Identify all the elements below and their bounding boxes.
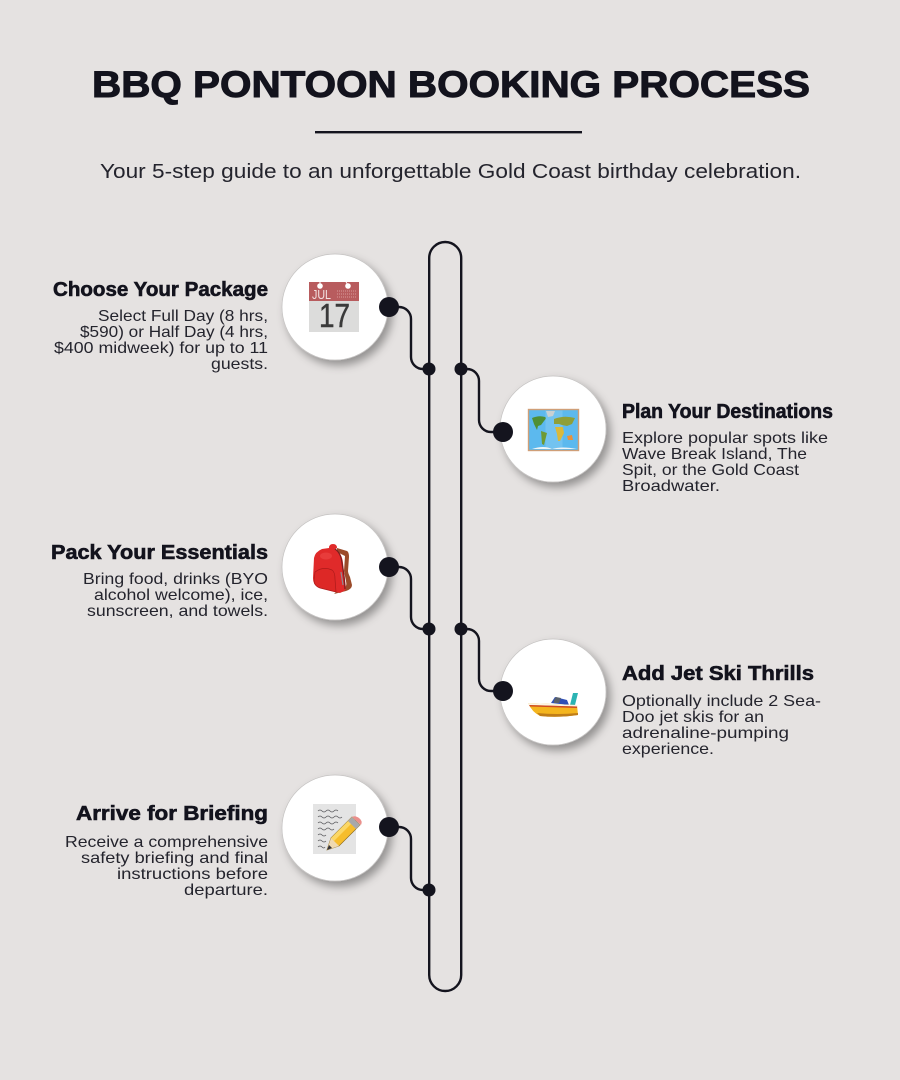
step 1 icon disc: calendar: JUL	[312, 288, 331, 302]
step 1 icon disc: calendar	[282, 254, 388, 360]
timeline track	[429, 242, 461, 991]
step 3 text: alcohol welcome), ice,	[94, 587, 268, 604]
step 5 text: instructions before	[117, 866, 268, 883]
step 4 text: Optionally include 2 Sea-	[622, 693, 821, 710]
step 3: pack your essentials	[51, 514, 436, 636]
step 4: add jet ski thrills	[454, 622, 821, 758]
step 3 text: Bring food, drinks (BYO	[83, 571, 268, 588]
step 5 text	[65, 803, 268, 899]
step 2 text: Explore popular spots like	[622, 430, 828, 447]
step 2 connector	[454, 362, 513, 442]
step 2 text: Spit, or the Gold Coast	[622, 462, 800, 479]
step 5 text: Arrive for Briefing	[76, 803, 268, 825]
step 3 connector	[379, 557, 436, 636]
subtitle: Your 5-step guide to an unforgettable Gold Coast birthday celebration.	[100, 161, 801, 183]
step 5 connector	[379, 817, 436, 896]
step 4 text: adrenaline-pumping	[622, 725, 789, 742]
step 1 text	[53, 279, 268, 373]
step 4 connector	[454, 622, 513, 701]
step 2: plan your destinations	[454, 362, 833, 495]
step 3 icon disc: backpack	[282, 514, 388, 620]
step 1 text: guests.	[211, 356, 268, 373]
step 1 text: Select Full Day (8 hrs,	[98, 308, 268, 325]
step 5 text: safety briefing and final	[81, 850, 268, 867]
step 4 text	[622, 663, 821, 758]
step 3 text: Pack Your Essentials	[51, 542, 268, 564]
step 3 text: sunscreen, and towels.	[87, 603, 268, 620]
step 5 text: Receive a comprehensive	[65, 834, 268, 851]
step 4 text: Doo jet skis for an	[622, 709, 764, 726]
step 5 text: departure.	[184, 882, 268, 899]
step 2 text: Plan Your Destinations	[622, 401, 833, 423]
step 4 text: experience.	[622, 741, 714, 758]
step 3 text	[51, 542, 268, 620]
step 2 text: Broadwater.	[622, 478, 720, 495]
step 4 icon disc: speedboat	[500, 639, 606, 745]
step 1 text: $590) or Half Day (4 hrs,	[80, 324, 268, 341]
step 2 text: Wave Break Island, The	[622, 446, 807, 463]
step 2 icon disc: world map	[500, 376, 606, 482]
step 4 text: Add Jet Ski Thrills	[622, 663, 814, 685]
step 5: arrive for briefing	[65, 775, 436, 899]
step 1: choose your package	[53, 254, 436, 376]
step 5 icon disc: memo and pencil	[282, 775, 388, 881]
step 1 icon disc: calendar: 17	[319, 297, 350, 334]
step 2 text	[622, 401, 833, 495]
step 1 text: $400 midweek) for up to 11	[54, 340, 268, 357]
title: BBQ PONTOON BOOKING PROCESS	[92, 64, 810, 105]
step 1 text: Choose Your Package	[53, 279, 268, 301]
step 1 connector	[379, 297, 436, 376]
